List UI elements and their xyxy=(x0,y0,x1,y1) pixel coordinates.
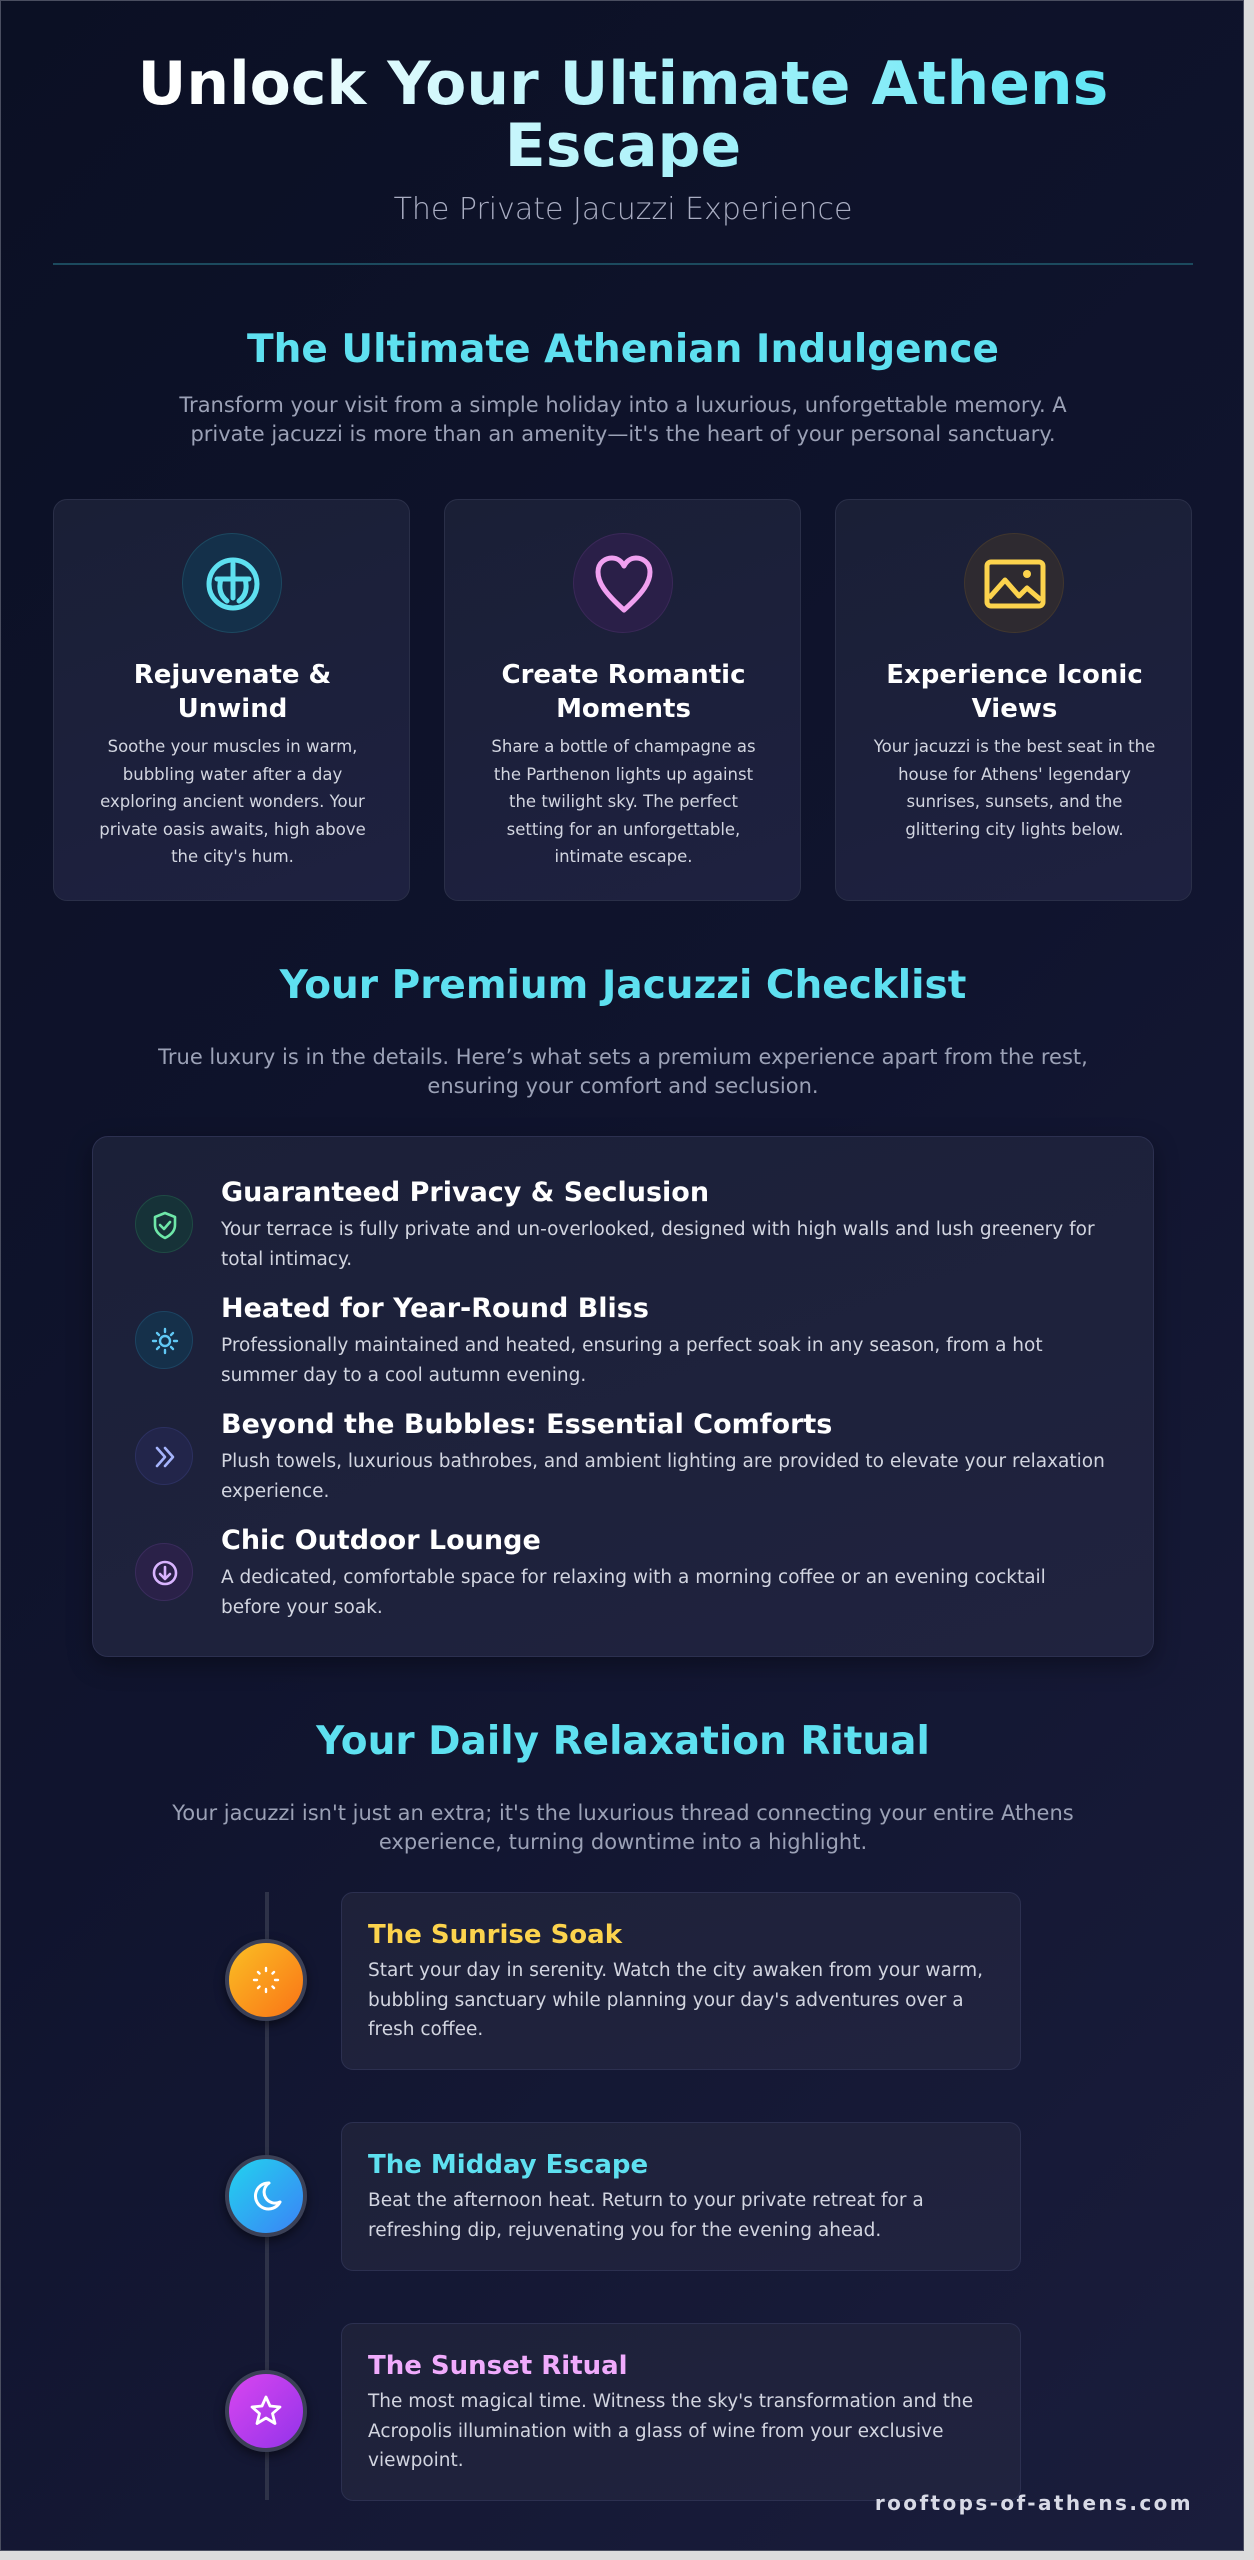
card: sunrise: The Sunrise Soak xyxy=(368,1920,622,1950)
heading: checklist: Your Premium Jacuzzi Checklist xyxy=(280,963,966,1008)
intro text: indulgence: Transform your visit from a simple holiday into a luxurious, unforgettable memory. A private jacuzzi is more than an amenity—it's the heart of your personal sanctuary. xyxy=(179,393,1067,446)
card: midday: Beat the afternoon heat. Return to your private retreat for a refreshing dip, rejuvenating you for the evening ahead. xyxy=(368,2190,924,2240)
icon: heart xyxy=(573,533,673,633)
icon: arrow down circle xyxy=(135,1543,193,1601)
panel: checklist xyxy=(92,1136,1154,1657)
item: heated xyxy=(135,1293,1043,1386)
panel: romantic xyxy=(444,499,801,901)
item: lounge: A dedicated, comfortable space for relaxing with a morning coffee or an evening cocktail before your soak. xyxy=(221,1567,1046,1618)
card: sunrise: Start your day in serenity. Watch the city awaken from your warm, bubbling sanctuary while planning your day's adventures over a fresh coffee. xyxy=(368,1960,983,2040)
item: lounge xyxy=(135,1525,1046,1618)
panel: views xyxy=(835,499,1192,901)
item: heated: Professionally maintained and heated, ensuring a perfect soak in any season, from a hot summer day to a cool autumn evening. xyxy=(221,1335,1043,1386)
heading: ritual: Your Daily Relaxation Ritual xyxy=(316,1719,930,1764)
icon: star xyxy=(225,2370,307,2452)
card title: Experience Iconic Views xyxy=(886,660,1143,724)
card title: Rejuvenate & Unwind xyxy=(134,660,331,724)
icon: image xyxy=(964,533,1064,633)
card text: Soothe your muscles in warm, bubbling water after a day exploring ancient wonders. Your private oasis awaits, high above the city's hum. xyxy=(99,737,366,866)
title: Escape xyxy=(505,111,741,181)
card text: Your jacuzzi is the best seat in the house for Athens' legendary sunrises, sunsets, and the glittering city lights below. xyxy=(874,737,1155,838)
item: comforts: Plush towels, luxurious bathrobes, and ambient lighting are provided to elevate your relaxation experience. xyxy=(221,1451,1105,1502)
item: heated: Heated for Year-Round Bliss xyxy=(221,1293,649,1324)
item: comforts xyxy=(135,1409,1105,1502)
icon: chevrons xyxy=(135,1427,193,1485)
item: comforts: Beyond the Bubbles: Essential Comforts xyxy=(221,1409,832,1440)
timeline xyxy=(223,1892,1021,2501)
intro text: ritual: Your jacuzzi isn't just an extra; it's the luxurious thread connecting your entire Athens experience, turning downtime into a highlight. xyxy=(172,1801,1074,1854)
icon: moon xyxy=(225,2155,307,2237)
item: privacy: Guaranteed Privacy & Seclusion xyxy=(221,1177,709,1208)
card: midday xyxy=(341,2122,1021,2271)
title xyxy=(1,53,1245,177)
item: lounge: Chic Outdoor Lounge xyxy=(221,1525,541,1556)
card: sunset: The most magical time. Witness the sky's transformation and the Acropolis illumination with a glass of wine from your exclusive viewpoint. xyxy=(368,2391,973,2471)
footer: website: rooftops-of-athens.com xyxy=(875,2491,1193,2515)
icon: sunrise xyxy=(225,1939,307,2021)
item: privacy: Your terrace is fully private and un-overlooked, designed with high walls and lush greenery for total intimacy. xyxy=(221,1219,1095,1270)
icon: shield xyxy=(135,1195,193,1253)
icon: sun xyxy=(135,1311,193,1369)
title: Unlock Your Ultimate Athens xyxy=(138,49,1108,119)
card: sunrise xyxy=(341,1892,1021,2070)
icon: spa xyxy=(182,533,282,633)
item: privacy xyxy=(135,1177,1095,1270)
heading: indulgence: The Ultimate Athenian Indulgence xyxy=(247,327,999,372)
card: sunset: The Sunset Ritual xyxy=(368,2351,628,2381)
intro text: checklist: True luxury is in the details. Here’s what sets a premium experience apart from the rest, ensuring your comfort and seclusion. xyxy=(158,1045,1088,1098)
panel: rejuvenate xyxy=(53,499,410,901)
card: sunset xyxy=(341,2323,1021,2501)
card text: Share a bottle of champagne as the Parthenon lights up against the twilight sky. The perfect setting for an unforgettable, intimate escape. xyxy=(491,737,756,866)
subtitle: The Private Jacuzzi Experience xyxy=(394,192,852,227)
card title: Create Romantic Moments xyxy=(502,660,745,724)
card: midday: The Midday Escape xyxy=(368,2150,648,2180)
